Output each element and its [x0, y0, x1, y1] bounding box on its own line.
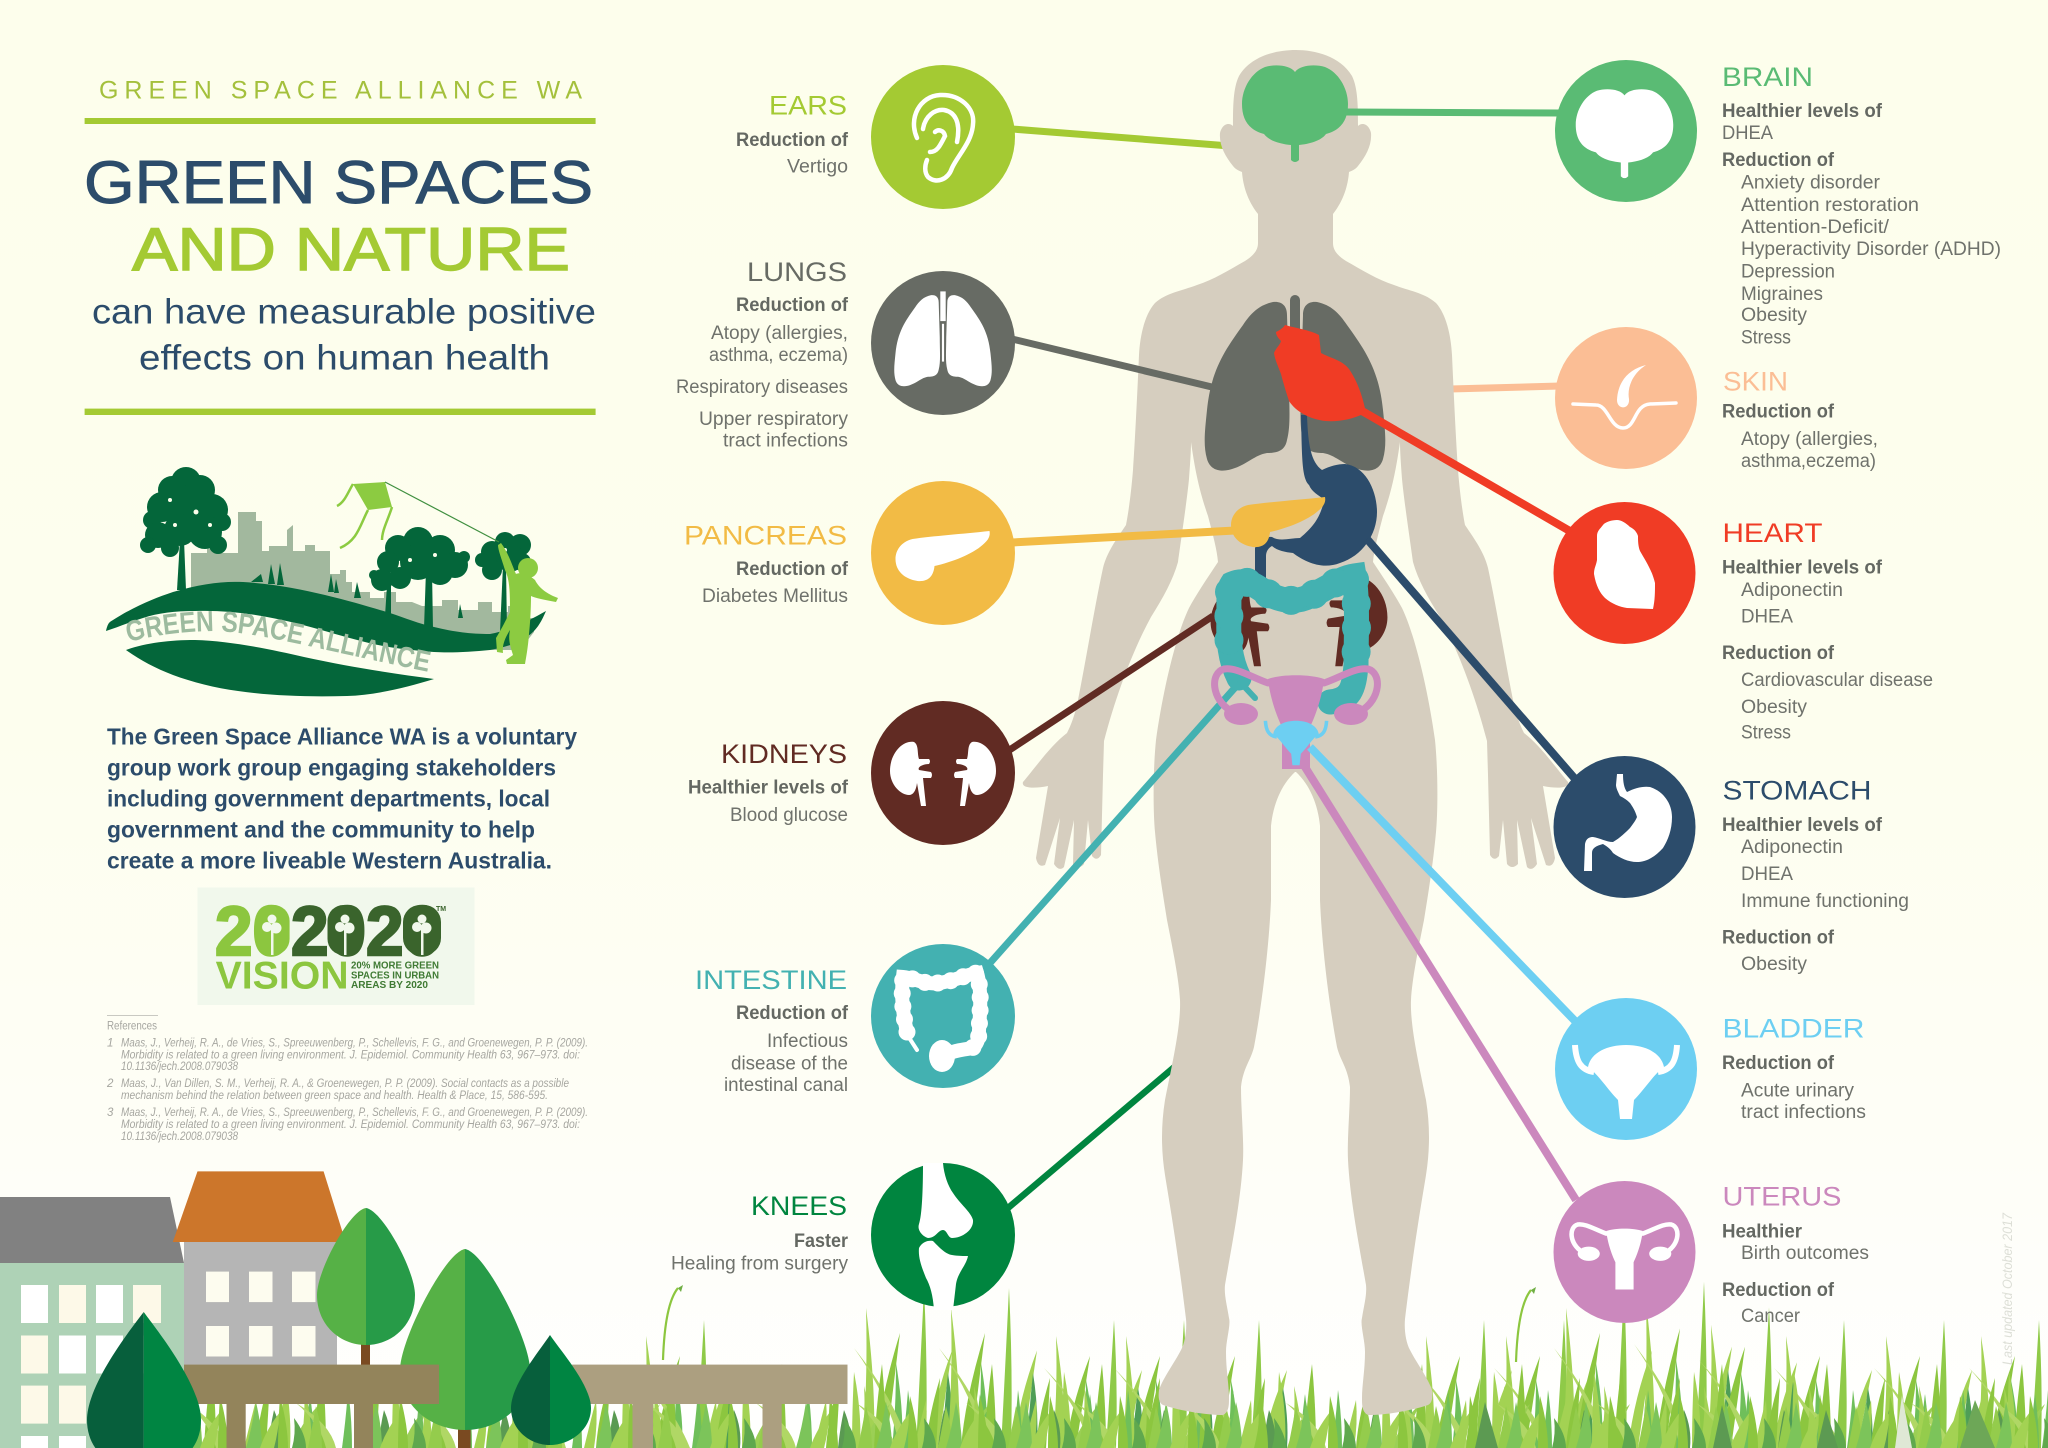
icon: pancreas — [871, 481, 1015, 625]
text: stomach: STOMACH — [1722, 776, 1872, 806]
building: green apartment — [0, 1197, 184, 1448]
text: lungs: Atopy (allergies, — [711, 323, 848, 344]
body silhouette — [1023, 50, 1568, 1415]
organ: pancreas — [1231, 497, 1325, 547]
references: 3 — [107, 1107, 114, 1119]
references: 10.1136/jech.2008.079038 — [121, 1131, 239, 1143]
text: stomach: DHEA — [1741, 864, 1793, 885]
text: brain: Healthier levels of — [1722, 101, 1883, 122]
icon: brain — [1555, 60, 1697, 202]
connector: pancreas — [1012, 530, 1235, 542]
text: brain: Anxiety disorder — [1741, 173, 1881, 194]
logo: green space alliance — [106, 467, 558, 696]
text: brain: BRAIN — [1722, 62, 1813, 92]
text: intestine: INTESTINE — [695, 965, 847, 995]
icon: skin — [1555, 327, 1697, 469]
rule bottom — [85, 409, 596, 415]
logo: 202020 vision: 2020 — [291, 892, 441, 970]
connector: bladder — [1310, 747, 1576, 1022]
references: Maas, J., Van Dillen, S. M., Verheij, R. A., & Groenewegen, P. P. (2009). Social contacts as a possible — [121, 1078, 569, 1090]
connector: heart — [1362, 411, 1575, 534]
references: References — [107, 1021, 157, 1033]
text: bladder: tract infections — [1741, 1102, 1866, 1123]
text: intestine: intestinal canal — [724, 1075, 848, 1096]
bench left — [184, 1365, 439, 1448]
text: heart: Adiponectin — [1741, 580, 1843, 601]
tree: dark left — [87, 1312, 201, 1448]
text: kidneys: Healthier levels of — [688, 778, 849, 799]
text: kidneys: KIDNEYS — [721, 739, 847, 769]
icon: intestine — [871, 944, 1015, 1088]
text: pancreas: PANCREAS — [684, 520, 847, 550]
text: bladder: Acute urinary — [1741, 1081, 1854, 1102]
logo: 202020 vision: 20% MORE GREEN — [351, 960, 439, 972]
text: knees: Faster — [794, 1231, 849, 1252]
text: ears: Vertigo — [787, 156, 848, 178]
logo: 202020 vision — [198, 888, 474, 1005]
text: brain: Reduction of — [1722, 150, 1835, 171]
text: heart: Stress — [1741, 723, 1791, 744]
text: bladder: BLADDER — [1722, 1014, 1864, 1044]
logo: 202020 vision: 20 — [215, 892, 290, 970]
text: heart — [1722, 518, 1933, 744]
text: stomach — [1722, 776, 1909, 975]
text: uterus — [1722, 1182, 1869, 1327]
tree: dark right — [511, 1335, 591, 1445]
logo: 202020 vision: TM — [436, 906, 446, 913]
text: heart: Cardiovascular disease — [1741, 670, 1933, 691]
description paragraph: including government departments, local — [107, 785, 550, 811]
organ: bladder — [1265, 721, 1327, 765]
text: brain: Attention-Deficit/ — [1741, 217, 1890, 238]
text: lungs: LUNGS — [747, 257, 847, 287]
organ: lungs — [1205, 295, 1385, 471]
description paragraph: group work group engaging stakeholders — [107, 754, 556, 780]
description paragraph: The Green Space Alliance WA is a voluntary — [107, 723, 577, 749]
header: organisation name: GREEN SPACE ALLIANCE WA — [99, 77, 582, 105]
organ: intestine — [1229, 576, 1356, 702]
kite flyer — [496, 543, 558, 664]
description paragraph: create a more liveable Western Australia. — [107, 847, 552, 873]
text: uterus: Reduction of — [1722, 1280, 1835, 1301]
text: knees: Healing from surgery — [671, 1254, 849, 1275]
text: skin: SKIN — [1723, 366, 1788, 396]
text: knees — [671, 1191, 849, 1275]
organ: brain — [1242, 65, 1348, 162]
icon: ear — [871, 65, 1015, 209]
subtitle — [92, 293, 596, 378]
text: uterus: Birth outcomes — [1741, 1243, 1869, 1264]
references: Morbidity is related to a green living environment. J. Epidemiol. Community Health 63, 967–973. doi: — [121, 1119, 580, 1131]
text: kidneys: Blood glucose — [730, 805, 848, 826]
text: ears: Reduction of — [736, 130, 849, 151]
text: knees: KNEES — [751, 1191, 847, 1221]
connector: intestine — [990, 682, 1240, 963]
text: stomach: Immune functioning — [1741, 891, 1909, 912]
text: lungs: tract infections — [723, 430, 848, 452]
logo: 202020 vision: SPACES IN URBAN — [351, 969, 439, 981]
connector: ears — [1012, 129, 1230, 146]
description paragraph — [107, 723, 577, 873]
text: brain: Attention restoration — [1741, 195, 1919, 216]
references — [106, 1015, 588, 1143]
text: stomach: Adiponectin — [1741, 837, 1843, 858]
rule top — [85, 118, 596, 124]
references: Morbidity is related to a green living environment. J. Epidemiol. Community Health 63, 967–973. doi: — [121, 1049, 580, 1061]
text: uterus: UTERUS — [1722, 1182, 1842, 1212]
organ: heart — [1274, 325, 1366, 421]
text: skin: Reduction of — [1722, 402, 1835, 423]
organ: uterus — [1215, 669, 1377, 769]
text: stomach: Obesity — [1741, 954, 1808, 975]
text: pancreas — [684, 520, 849, 607]
subtitle: can have measurable positive — [92, 293, 596, 332]
connector: kidneys — [1008, 616, 1213, 751]
references: 1 — [107, 1037, 113, 1049]
text: skin: asthma,eczema) — [1741, 451, 1876, 472]
text: stomach: Healthier levels of — [1722, 815, 1883, 836]
organ: kidneys — [1211, 576, 1387, 666]
icon: heart — [1554, 502, 1696, 644]
text: brain — [1722, 62, 2001, 349]
text: brain: Obesity — [1741, 305, 1808, 326]
text: ears — [736, 91, 849, 178]
icon: kidneys — [871, 701, 1015, 845]
references: 2 — [106, 1078, 114, 1090]
text: uterus: Healthier — [1722, 1222, 1803, 1242]
text: intestine: disease of the — [731, 1054, 848, 1074]
text: pancreas: Reduction of — [736, 559, 849, 580]
connector: knees — [1008, 1058, 1185, 1208]
text: lungs: Reduction of — [736, 295, 849, 316]
references: mechanism behind the relation between green space and health. Health & Place, 15, 586-595. — [121, 1090, 548, 1102]
text: skin: Atopy (allergies, — [1741, 429, 1878, 450]
icon: uterus — [1554, 1181, 1696, 1323]
text: brain: Migraines — [1741, 284, 1823, 305]
logo: 202020 vision: AREAS BY 2020 — [351, 979, 428, 991]
title — [84, 149, 593, 283]
text: intestine — [695, 965, 849, 1096]
references: Maas, J., Verheij, R. A., de Vries, S., Spreeuwenberg, P., Schellevis, F. G., and Groenewegen, P. P. (2009). — [121, 1037, 588, 1049]
icon: bladder — [1555, 998, 1697, 1140]
text: heart: Reduction of — [1722, 643, 1835, 664]
last updated note: Last updated October 2017 — [1999, 1212, 2015, 1365]
logo: green space alliance: GREEN SPACE ALLIANCE — [126, 611, 431, 672]
connector: skin — [1450, 386, 1560, 389]
grass field — [186, 1282, 2048, 1448]
text: ears: EARS — [769, 91, 847, 121]
text: intestine: Reduction of — [736, 1003, 849, 1024]
references: Maas, J., Verheij, R. A., de Vries, S., Spreeuwenberg, P., Schellevis, F. G., and Groenewegen, P. P. (2009). — [121, 1107, 588, 1119]
text: stomach: Reduction of — [1722, 928, 1835, 949]
text: lungs — [676, 257, 849, 452]
title: GREEN SPACES — [84, 149, 593, 216]
text: brain: Hyperactivity Disorder (ADHD) — [1741, 239, 2001, 260]
text: lungs: Respiratory diseases — [676, 377, 848, 398]
icon: lungs — [871, 271, 1015, 415]
bench right — [570, 1365, 848, 1448]
tree: light small — [317, 1208, 415, 1366]
text: heart: HEART — [1722, 518, 1822, 548]
subtitle: effects on human health — [139, 339, 550, 378]
tree: large — [400, 1249, 530, 1448]
text: heart: DHEA — [1741, 607, 1793, 628]
text: brain: Stress — [1741, 328, 1791, 349]
text: brain: DHEA — [1722, 123, 1773, 144]
text: lungs: Upper respiratory — [699, 409, 849, 430]
connector: lungs — [1012, 339, 1216, 388]
text: heart: Obesity — [1741, 697, 1808, 718]
text: intestine: Infectious — [767, 1031, 848, 1052]
text: uterus: Cancer — [1741, 1306, 1801, 1327]
text: bladder: Reduction of — [1722, 1053, 1835, 1074]
icon: knee — [871, 1163, 1015, 1310]
text: bladder — [1722, 1014, 1866, 1123]
text: pancreas: Diabetes Mellitus — [702, 586, 848, 607]
connector: brain — [1344, 112, 1560, 113]
title: AND NATURE — [132, 216, 570, 283]
logo: 202020 vision: VISION — [216, 955, 349, 998]
organ: stomach — [1255, 415, 1377, 580]
description paragraph: government and the community to help — [107, 816, 535, 842]
text: lungs: asthma, eczema) — [709, 345, 848, 366]
text: kidneys — [688, 739, 849, 826]
connector: uterus — [1305, 767, 1576, 1200]
text: brain: Depression — [1741, 262, 1835, 282]
icon: stomach — [1554, 756, 1696, 898]
kite — [337, 482, 499, 548]
text: skin — [1722, 366, 1878, 472]
building: orange roof house — [173, 1171, 346, 1365]
text: heart: Healthier levels of — [1722, 558, 1883, 578]
connector: stomach — [1367, 539, 1576, 780]
references: 10.1136/jech.2008.079038 — [121, 1061, 239, 1073]
